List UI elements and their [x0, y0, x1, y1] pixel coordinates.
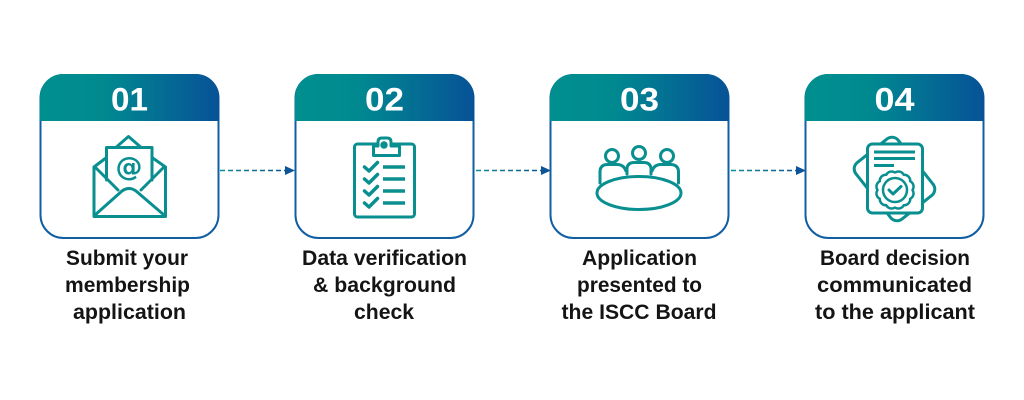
label: to the applicant	[815, 301, 975, 324]
arrow: step 02 to 03	[476, 166, 551, 175]
panel: step 01	[40, 74, 219, 324]
label: Board decision	[820, 247, 970, 270]
label: Application	[582, 247, 697, 270]
header band	[295, 74, 474, 121]
icon: open envelope: @	[116, 152, 142, 183]
card body	[806, 75, 984, 238]
panel: step 03	[550, 74, 729, 324]
step number: 01	[111, 82, 148, 118]
header band	[805, 74, 984, 121]
label: the ISCC Board	[562, 301, 716, 324]
header band	[40, 74, 219, 121]
step number: 02	[365, 82, 404, 118]
label: membership	[65, 274, 190, 297]
card body	[40, 75, 218, 238]
label: & background	[313, 274, 456, 297]
label: communicated	[817, 274, 972, 297]
step number: 03	[620, 82, 659, 118]
label: presented to	[577, 274, 702, 297]
icon: open envelope	[94, 136, 166, 216]
panel: step 02	[295, 74, 474, 324]
icon: board meeting table	[597, 146, 681, 210]
label: Submit your	[66, 247, 188, 270]
icon: clipboard checklist	[354, 138, 414, 217]
step number: 04	[874, 82, 915, 118]
arrow: step 01 to 02	[220, 166, 295, 175]
header band	[550, 74, 729, 121]
card body	[550, 75, 728, 238]
label: check	[354, 301, 414, 324]
icon: certified document	[851, 134, 938, 224]
panel: step 04	[805, 74, 984, 324]
label	[302, 247, 467, 324]
label	[562, 247, 716, 324]
arrow: step 03 to 04	[731, 166, 806, 175]
label: application	[73, 301, 186, 324]
card body	[296, 75, 474, 238]
label: Data verification	[302, 247, 467, 270]
label	[815, 247, 975, 324]
label	[65, 247, 190, 324]
